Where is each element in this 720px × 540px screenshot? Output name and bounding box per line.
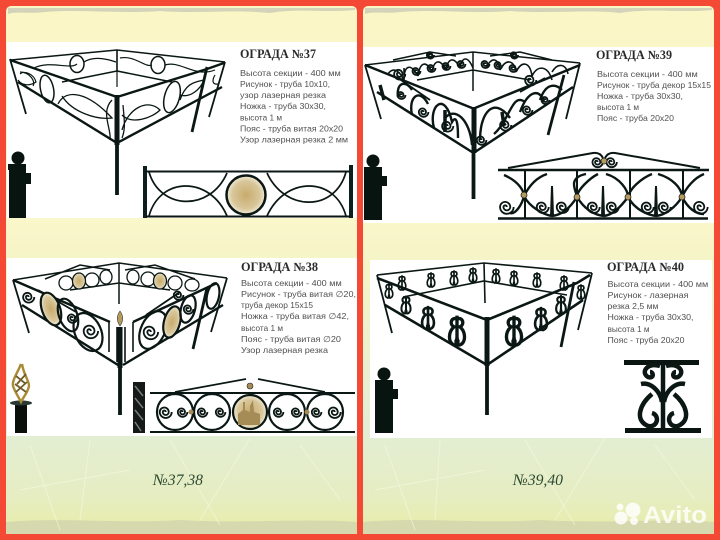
specs: fence 37: высота 1 м bbox=[240, 112, 282, 122]
specs: fence 40: Рисунок - лазерная bbox=[608, 290, 689, 300]
specs: fence 39: Высота секции - 400 мм bbox=[597, 69, 698, 79]
icon: post cap 40 bbox=[375, 368, 398, 433]
heading: fence 39: ОГРАДА №39 bbox=[596, 48, 672, 62]
specs: fence 38: труба декор 15х15 bbox=[241, 300, 313, 310]
panel: fence 39 bbox=[363, 47, 714, 223]
panel: left sheet bbox=[6, 6, 357, 534]
specs: fence 38: Ножка - труба витая ∅42, bbox=[241, 311, 349, 321]
panel: fence 38 bbox=[7, 258, 357, 436]
specs: fence 40: Высота секции - 400 мм bbox=[608, 279, 708, 289]
fence 37 perspective drawing bbox=[10, 50, 225, 195]
specs: fence 39: высота 1 м bbox=[597, 102, 639, 112]
icon: watermark logo: Avito bbox=[643, 502, 707, 529]
icon: post cap 39 bbox=[364, 154, 387, 220]
specs: fence 38: высота 1 м bbox=[241, 323, 283, 333]
panel: right sheet bbox=[363, 6, 714, 534]
caption: numbers 37, 38: №37,38 bbox=[152, 472, 203, 489]
specs: fence 39 bbox=[597, 69, 711, 123]
fence 40 section bbox=[624, 360, 701, 433]
specs: fence 37: Ножка - труба 30х30, bbox=[240, 101, 326, 111]
specs: fence 37: узор лазерная резка bbox=[240, 90, 326, 100]
fence 40 perspective drawing bbox=[377, 263, 592, 415]
specs: fence 38: Узор лазерная резка bbox=[241, 345, 328, 355]
icon: twisted finial post bbox=[10, 364, 32, 433]
specs: fence 38 bbox=[241, 278, 356, 355]
specs: fence 39: Пояс - труба 20х20 bbox=[597, 113, 674, 123]
specs: fence 37: Пояс - труба витая 20х20 bbox=[240, 124, 343, 134]
caption: numbers 39, 40: №39,40 bbox=[512, 472, 563, 489]
fence 37 section bbox=[143, 165, 353, 218]
specs: fence 38: Рисунок - труба витая ∅20, bbox=[241, 289, 356, 299]
specs: fence 40 bbox=[608, 279, 708, 345]
panel: fence 37 bbox=[7, 42, 357, 218]
specs: fence 40: Ножка - труба 30х30, bbox=[608, 312, 694, 322]
icon: twisted pipe sample bbox=[133, 382, 145, 433]
panel: fence 40 bbox=[370, 260, 712, 438]
heading: fence 40: ОГРАДА №40 bbox=[607, 260, 684, 274]
fence 39 perspective drawing bbox=[365, 52, 580, 199]
icon: post cap 37 bbox=[8, 152, 31, 218]
specs: fence 39: Рисунок - труба декор 15х15 bbox=[597, 80, 711, 90]
specs: fence 38: Высота секции - 400 мм bbox=[241, 278, 342, 288]
specs: fence 38: Пояс - труба витая ∅20 bbox=[241, 334, 341, 344]
specs: fence 37: Рисунок - труба 10х10, bbox=[240, 79, 330, 89]
specs: fence 37: Узор лазерная резка 2 мм bbox=[240, 135, 348, 145]
fence 38 section bbox=[150, 379, 355, 432]
fence 39 section bbox=[498, 153, 709, 218]
specs: fence 40: резка 2,5 мм bbox=[608, 301, 659, 311]
fence 38 perspective drawing bbox=[13, 263, 227, 415]
specs: fence 39: Ножка - труба 30х30, bbox=[597, 91, 683, 101]
icon: watermark logo bbox=[614, 502, 707, 529]
specs: fence 37: Высота секции - 400 мм bbox=[240, 68, 341, 78]
heading: fence 38: ОГРАДА №38 bbox=[241, 260, 318, 274]
specs: fence 37 bbox=[240, 68, 348, 145]
specs: fence 40: Пояс - труба 20х20 bbox=[608, 335, 685, 345]
specs: fence 40: высота 1 м bbox=[608, 324, 650, 334]
heading: fence 37: ОГРАДА №37 bbox=[240, 47, 316, 61]
